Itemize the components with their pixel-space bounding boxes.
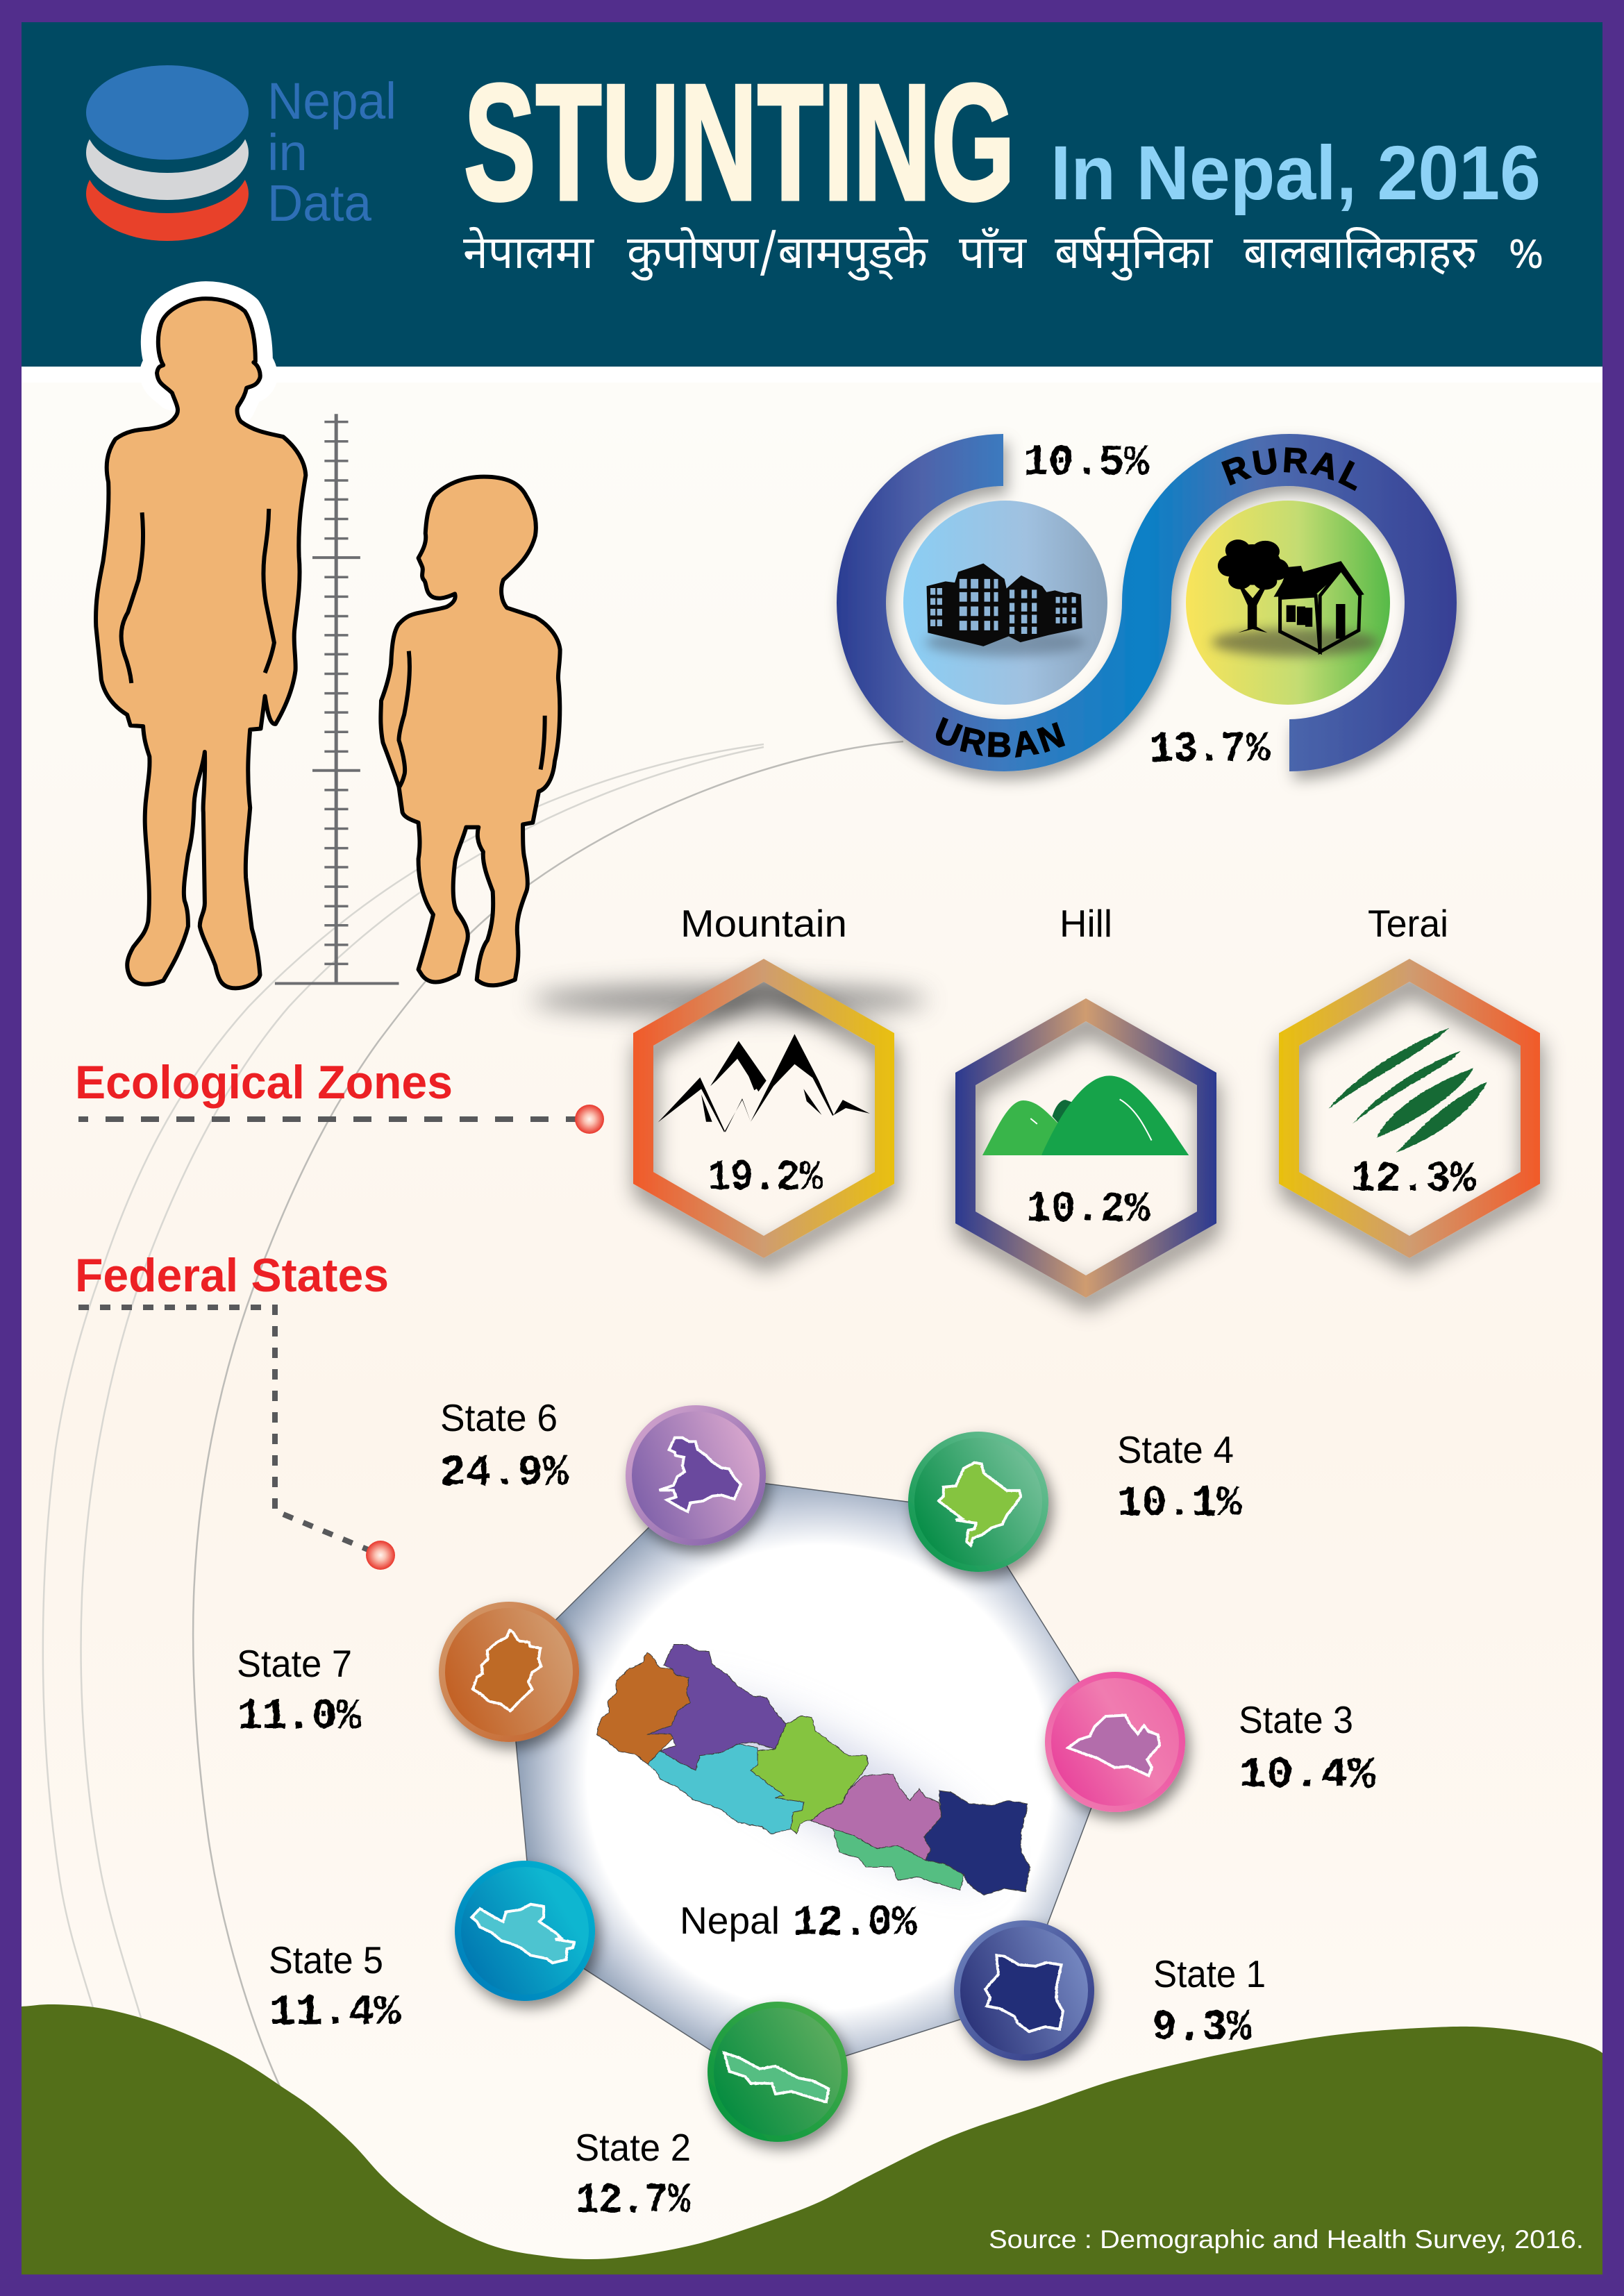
source note: Source : Demographic and Health Survey, 2016. (989, 2225, 1584, 2254)
Nepali subtitle: पाँच (959, 227, 1027, 287)
value: urban: 10.5% (1023, 438, 1150, 487)
white halo around head (157, 299, 260, 407)
value: State 6: 24.9% (440, 1448, 569, 1498)
value: State 1: 9.3% (1152, 2003, 1253, 2052)
label: State 4: State 4 (1117, 1428, 1234, 1471)
label: Nepal total: Nepal (680, 1899, 780, 1942)
infinity ring (837, 434, 1457, 771)
dashed connector (78, 1116, 576, 1122)
subtitle: In Nepal, 2016 (1050, 131, 1541, 216)
badge: State 1 (954, 1920, 1094, 2061)
label: RURAL (1221, 447, 1357, 492)
map of Nepal (596, 1644, 1030, 1895)
label: Hill: Hill (1060, 902, 1112, 945)
heading: Ecological Zones: Ecological Zones (75, 1056, 453, 1109)
logo text: Data (267, 174, 372, 232)
title: STUNTING (464, 51, 1015, 235)
badge: State 2 (708, 2002, 848, 2142)
figure: taller child (96, 299, 305, 988)
badge: State 3 (1045, 1672, 1185, 1812)
value: rural: 13.7% (1150, 725, 1270, 774)
icon: tree and house (1218, 539, 1364, 652)
label: State 2: State 2 (575, 2126, 691, 2169)
urban shadow (926, 628, 1085, 656)
Nepali subtitle: बालबालिकाहरु (1244, 227, 1477, 287)
hexagon: Hill (955, 998, 1216, 1298)
icon: terai grass strokes (1328, 1028, 1487, 1153)
label: State 7: State 7 (237, 1642, 352, 1685)
panel: ecological zones (75, 902, 1540, 1298)
Nepali subtitle: नेपालमा (463, 227, 595, 287)
value: Nepal total: 12.0% (793, 1898, 918, 1947)
Nepali subtitle: % (1508, 227, 1544, 287)
label: Terai: Terai (1368, 902, 1448, 945)
value: State 2: 12.7% (576, 2176, 692, 2225)
rural disc (1186, 501, 1390, 705)
logo text: in (267, 124, 308, 181)
Nepali subtitle (463, 226, 1544, 287)
heading: Federal States: Federal States (75, 1249, 389, 1302)
dashed connector (78, 1307, 368, 1550)
arm lines (399, 651, 545, 787)
value: Hill: 10.2% (1026, 1184, 1150, 1234)
value: State 3: 10.4% (1239, 1750, 1376, 1800)
badge: State 4 (908, 1432, 1048, 1572)
icon: buildings (927, 564, 1082, 646)
curved background arcs (43, 741, 903, 2086)
body outline (380, 477, 560, 985)
central heptagon (509, 1475, 1116, 2083)
panel: urban and rural (832, 433, 1471, 789)
label: State 5: State 5 (269, 1938, 383, 1981)
icon: hills (982, 1075, 1189, 1155)
label: URBAN: URBAN (936, 717, 1065, 758)
body outline (96, 299, 305, 988)
logo text (267, 72, 396, 232)
header band (22, 22, 1602, 367)
logo: Nepal in Data (86, 65, 396, 241)
logo icon: stacked discs (86, 65, 249, 241)
badge: State 7 (439, 1602, 579, 1742)
connector dot (366, 1541, 395, 1570)
rural shadow (1212, 628, 1378, 656)
label: RURAL: RURAL (1221, 447, 1357, 492)
figure: stunted child (380, 477, 560, 985)
value: State 5: 11.4% (269, 1988, 401, 2037)
label: State 3: State 3 (1239, 1698, 1353, 1741)
value: State 4: 10.1% (1117, 1479, 1242, 1528)
urban disc (903, 501, 1107, 705)
blurred shadow above mountain hexagon (531, 984, 927, 1015)
connector dot (575, 1105, 604, 1134)
height ruler (275, 414, 399, 983)
hexagon: Mountain (633, 959, 894, 1258)
badge: State 5 (455, 1861, 595, 2001)
label: URBAN (936, 717, 1065, 758)
icon: mountains (658, 1034, 870, 1132)
Nepali subtitle: कुपोषण/बामपुड्के (627, 227, 928, 287)
value: Terai: 12.3% (1350, 1155, 1476, 1204)
ground hill (22, 2004, 1602, 2274)
label: Mountain: Mountain (680, 902, 847, 945)
value: State 7: 11.0% (237, 1692, 362, 1741)
Nepali subtitle: बर्षमुनिका (1055, 226, 1214, 287)
arm lines (122, 509, 274, 683)
hexagon: Terai (1279, 959, 1540, 1258)
badge: State 6 (626, 1405, 766, 1545)
panel: federal states (75, 1249, 1376, 2225)
label: State 6: State 6 (440, 1396, 558, 1439)
value: Mountain: 19.2% (708, 1153, 823, 1203)
label: State 1: State 1 (1153, 1952, 1266, 1995)
logo text: Nepal (267, 72, 396, 130)
map shadow (660, 1666, 1006, 1902)
